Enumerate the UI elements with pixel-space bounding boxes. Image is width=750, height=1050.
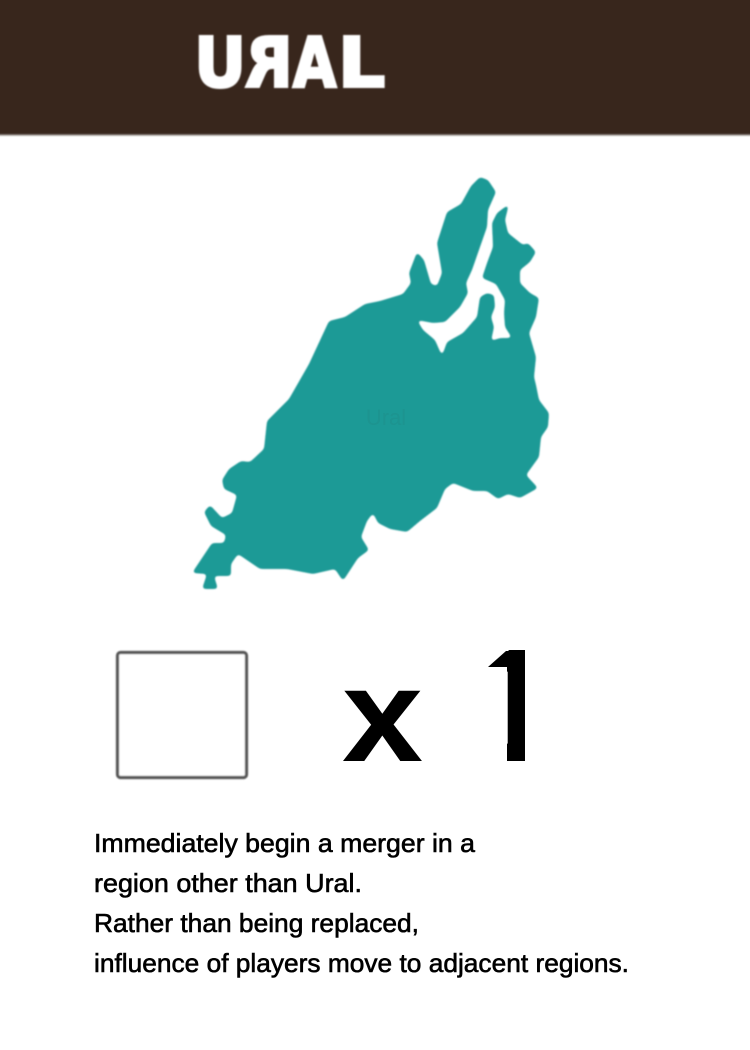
description text xyxy=(94,828,629,978)
description text: region other than Ural. xyxy=(94,868,362,898)
header band xyxy=(0,0,750,135)
description text: influence of players move to adjacent regions. xyxy=(94,948,629,978)
title logo: URAL xyxy=(194,22,385,103)
description text: Rather than being replaced, xyxy=(94,908,419,938)
count: x 1: x xyxy=(342,642,423,790)
description text: Immediately begin a merger in a xyxy=(94,828,476,858)
title logo: URAL: A xyxy=(293,23,337,103)
map label: Ural xyxy=(366,405,406,430)
title logo: URAL: U xyxy=(194,22,246,103)
map: Ural region xyxy=(192,177,549,589)
title logo: URAL: L xyxy=(338,23,385,103)
icon: empty square token xyxy=(118,652,246,778)
count: x 1: 1 xyxy=(475,617,555,796)
count: x 1 xyxy=(343,650,525,761)
title logo: URAL: R xyxy=(245,23,292,103)
